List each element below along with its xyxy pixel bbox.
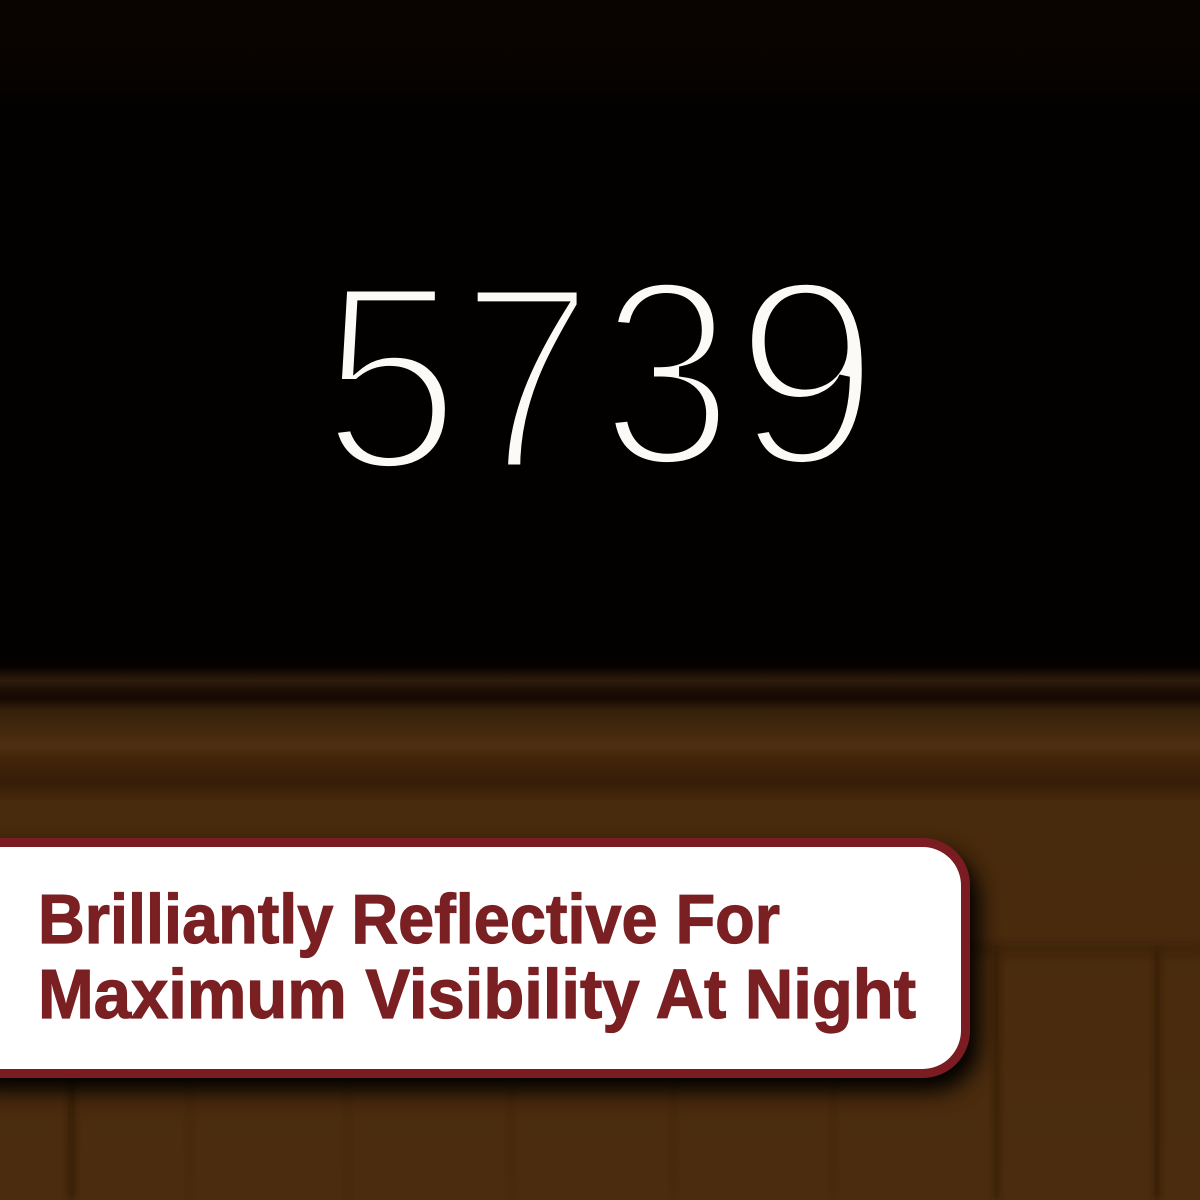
callout headline: Maximum Visibility At Night [38,955,916,1033]
digit 5: 5 [321,228,461,526]
digit 7: 7 [460,229,594,527]
digit 9: 9 [735,225,879,522]
callout headline: Brilliantly Reflective For [38,880,780,958]
card background [0,842,966,1074]
callout card [0,842,966,1074]
wood panel grooves [68,946,1200,1200]
callout headline [38,880,916,1033]
house number 5739 [321,224,879,527]
digit 3: 3 [600,224,734,522]
